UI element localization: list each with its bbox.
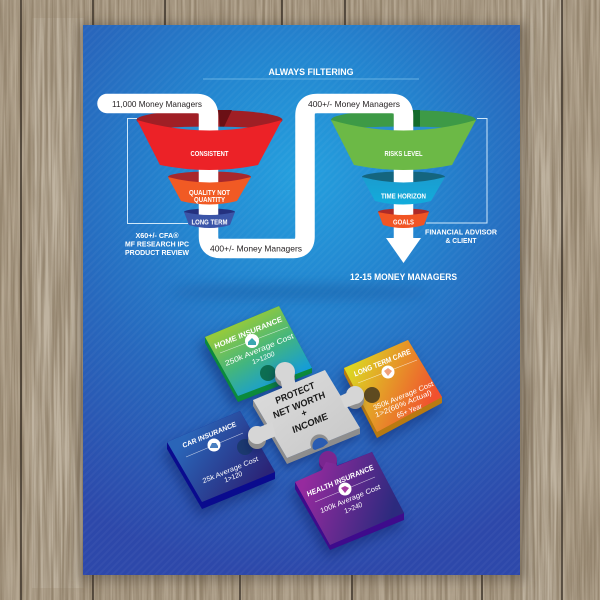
label: financial advisor: FINANCIAL ADVISOR	[425, 230, 497, 236]
label: research team: X60+/- CFA®	[136, 232, 179, 240]
label: financial advisor	[425, 230, 497, 245]
puzzle piece: center protect net worth + income: PROTECT	[274, 380, 316, 407]
puzzle piece: home insurance	[205, 306, 312, 402]
label: 400 money managers top: 400+/- Money Managers	[308, 99, 400, 109]
label: financial advisor: & CLIENT	[446, 238, 477, 245]
funnel: time horizon: TIME HORIZON	[381, 194, 426, 200]
label: 12-15 money managers: 12-15 MONEY MANAGERS	[350, 272, 457, 282]
puzzle piece: center protect net worth + income: NET WORTH	[272, 390, 327, 422]
puzzle piece: long term care	[344, 340, 442, 438]
puzzle piece: long term care: 65+ Year	[396, 402, 424, 420]
funnel: quality not quantity: QUALITY NOT	[189, 190, 231, 197]
puzzle piece: car insurance	[167, 411, 275, 509]
puzzle piece: home insurance: 250k Average Cost	[224, 331, 296, 368]
funnel: long term: LONG TERM	[192, 220, 228, 226]
white flow pipe and arrow	[107, 104, 421, 263]
funnel: time horizon	[362, 177, 445, 204]
funnel backs	[136, 110, 476, 216]
puzzle piece: car insurance: CAR INSURANCE	[182, 421, 238, 450]
puzzle piece: center protect net worth + income: +	[300, 407, 309, 420]
funnel: risks level	[331, 120, 476, 170]
funnel: consistent: CONSISTENT	[190, 151, 229, 158]
puzzle piece: health insurance: 100k Average Cost	[319, 483, 382, 515]
poster shadow	[79, 23, 527, 581]
puzzle piece: health insurance: 1>240	[343, 501, 363, 516]
puzzle piece: car insurance: 25k Average Cost	[202, 456, 259, 485]
left bracket	[128, 118, 188, 224]
heading: always filtering: ALWAYS FILTERING	[268, 67, 354, 77]
puzzle piece: health insurance	[295, 451, 404, 550]
puzzle piece: center protect net worth + income	[248, 362, 364, 464]
right bracket	[426, 118, 487, 223]
funnel: goals	[378, 212, 429, 228]
puzzle piece: home insurance: 1>1200	[251, 351, 276, 366]
funnel: quality not quantity: QUANTITY	[194, 197, 225, 204]
puzzle piece: long term care: LONG TERM CARE	[353, 347, 412, 378]
label: 400 money managers bottom: 400+/- Money Managers	[210, 244, 302, 254]
funnel: risks level: RISKS LEVEL	[384, 151, 423, 158]
funnel: quality not quantity	[168, 177, 251, 204]
poster panel	[83, 25, 520, 575]
funnel: consistent	[137, 120, 282, 170]
label: 11,000 money managers: 11,000 Money Managers	[112, 99, 202, 109]
puzzle piece: car insurance: 1>120	[224, 471, 243, 485]
puzzle piece: center protect net worth + income: INCOME	[291, 411, 329, 436]
puzzle piece: home insurance: HOME INSURANCE	[213, 314, 283, 351]
label: research team	[125, 232, 189, 257]
funnel: long term	[184, 212, 235, 228]
label: research team: PRODUCT REVIEW	[125, 250, 189, 257]
puzzle piece: health insurance: HEALTH INSURANCE	[306, 463, 375, 499]
puzzle piece: long term care: 350k Average Cost	[372, 380, 435, 412]
puzzle piece: long term care: 1>2(66% Actual)	[374, 389, 433, 419]
label: research team: MF RESEARCH IPC	[125, 242, 189, 248]
funnel: goals: GOALS	[393, 220, 414, 226]
